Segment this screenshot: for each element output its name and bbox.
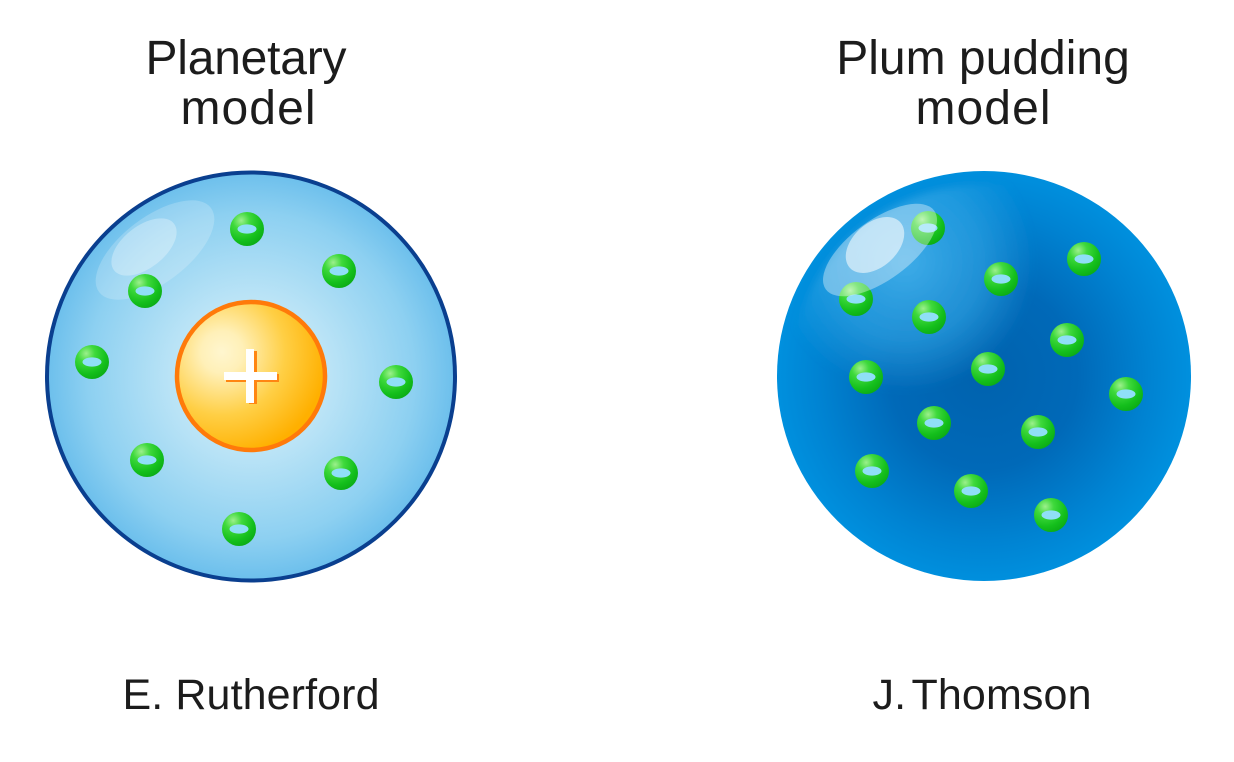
title: Plum pudding model: model [916,82,1050,135]
inner sheen [790,184,1178,568]
title: Planetary model: model [180,82,316,135]
glossy highlight [808,186,952,314]
electron cloud sphere [47,172,455,580]
label: E. Rutherford: E. Rutherford [122,671,380,719]
electrons [839,211,1143,532]
label: J. Thomson: J. Thomson [872,671,1092,719]
nucleus [177,302,325,450]
electrons [75,212,413,546]
title: Planetary model [146,32,346,135]
title: Plum pudding model: Plum pudding [836,32,1130,85]
positive sphere [777,171,1191,581]
highlight on cloud [79,182,231,318]
title: Plum pudding model [836,32,1130,135]
diagram: planetary atom [47,172,455,580]
plus sign [224,349,279,404]
diagram: plum pudding atom [777,171,1191,581]
title: Planetary model: Planetary [146,32,346,85]
